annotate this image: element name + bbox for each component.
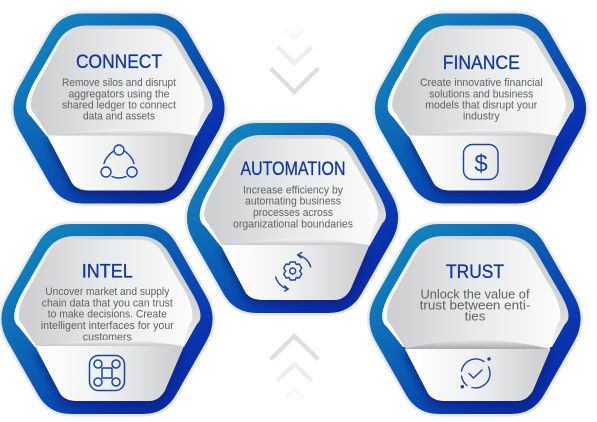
text: connect description: Remove silos and disrupt — [62, 77, 177, 89]
text: intel description: chain data that you can trust — [42, 297, 174, 309]
panel: finance — [375, 14, 586, 204]
chevrons pointing up — [271, 336, 318, 398]
text: intel description: Uncover market and supply — [45, 286, 170, 298]
text: finance description: solutions and business — [429, 88, 534, 100]
text: automation description — [233, 184, 353, 230]
panel: automation — [187, 123, 398, 313]
chevrons pointing down — [271, 29, 318, 92]
heading: finance: FINANCE — [443, 53, 520, 74]
text: finance description: models that disrupt your — [425, 100, 538, 112]
panel: intel — [1, 224, 213, 414]
text: intel description: intelligent interfaces for your — [41, 320, 174, 332]
icon: gear with arrows — [276, 252, 311, 291]
icon: command key — [90, 356, 124, 390]
heading: trust: TRUST — [446, 262, 504, 283]
text: connect description — [62, 77, 177, 122]
text: connect description: data and assets — [83, 110, 155, 122]
icon: check in circle — [461, 357, 491, 388]
text: finance description — [420, 77, 543, 122]
text: connect description: aggregators using the — [68, 88, 170, 100]
heading: connect: CONNECT — [76, 52, 162, 73]
text: automation description: processes across — [253, 207, 333, 219]
text: trust description — [420, 287, 530, 324]
text: automation description: automating business — [245, 196, 341, 208]
icon: dollar: $ — [474, 150, 488, 178]
text: automation description: organizational boundaries — [233, 218, 353, 230]
panel: connect — [13, 14, 225, 204]
text: trust description: Unlock the value of — [420, 287, 530, 301]
text: trust description: trust between enti- — [420, 299, 530, 313]
text: connect description: shared ledger to connect — [62, 100, 177, 112]
text: intel description: customers — [83, 331, 132, 343]
text: intel description: to make decisions. Create — [48, 309, 167, 321]
text: finance description: Create innovative financial — [420, 77, 543, 89]
heading: intel: INTEL — [82, 262, 133, 283]
icon: connected nodes — [101, 145, 137, 178]
heading: automation: AUTOMATION — [240, 159, 346, 180]
text: intel description — [41, 286, 174, 343]
panel: trust — [369, 224, 581, 414]
icon: dollar — [464, 144, 498, 180]
text: automation description: Increase efficiency by — [243, 184, 343, 196]
text: finance description: industry — [463, 110, 500, 122]
text: trust description: ties — [465, 310, 485, 324]
